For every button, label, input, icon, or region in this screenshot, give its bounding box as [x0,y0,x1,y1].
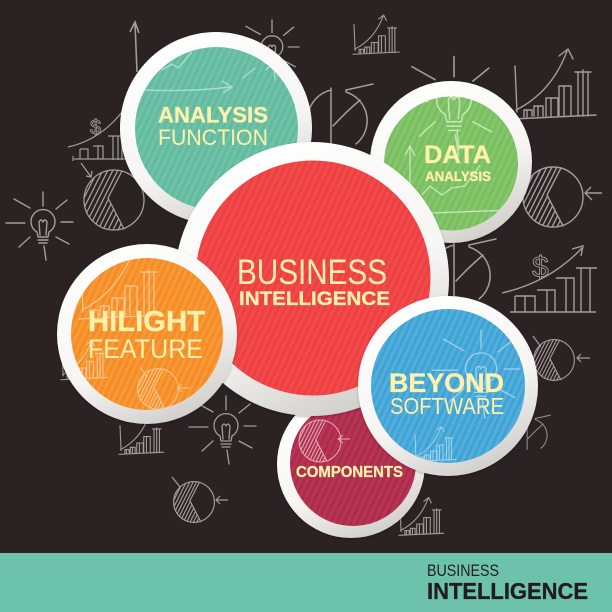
doodle: small pie right [533,336,590,380]
doodle: small chart top [353,15,399,54]
doodle: bulb bottom [189,396,256,464]
panel: hilight feature (orange) [57,244,237,424]
doodle: pie left [81,163,144,230]
panel: data analysis (green) [370,81,532,245]
footer title [427,561,588,604]
doodle: half pie small [514,415,550,449]
doodle: chart under orange [61,341,107,380]
text: business intelligence: INTELLIGENCE [239,288,390,310]
text: beyond software [389,368,504,419]
text: components: COMPONENTS [296,464,403,481]
text: hilight feature [88,306,205,364]
doodle: half pie right [431,239,496,301]
text: data analysis: ANALYSIS [425,168,491,184]
footer band [0,553,612,612]
text: hilight feature: HILIGHT [88,306,205,338]
panel: components (maroon) [277,407,424,538]
panel: beyond software (blue) [358,296,538,476]
text: analysis function: ANALYSIS [158,102,268,128]
doodle: chart bottom left [119,417,164,454]
green overlay doodle [404,96,500,214]
text: beyond software: SOFTWARE [390,393,504,419]
panel: business intelligence (red) [178,142,449,418]
text: data analysis: DATA [424,141,491,169]
orange overlay doodle [77,258,190,410]
doodle: dollar chart left: $ [90,117,101,139]
text: business intelligence: BUSINESS [237,253,387,292]
text: hilight feature: FEATURE [88,334,203,364]
text: data analysis [424,141,491,184]
maroon overlay doodle [299,420,350,462]
doodle: bulb top [239,20,299,81]
doodle: dollar chart right: $ [532,251,549,284]
doodle: tall arrow [130,22,139,72]
blue overlay doodle [414,330,520,462]
doodle: pie bottom [172,477,228,522]
footer title: INTELLIGENCE [427,578,588,604]
doodle: bulb behind green [400,56,498,155]
text: analysis function [158,102,268,150]
text: beyond software: BEYOND [389,368,504,398]
doodle: large chart right [513,49,596,119]
doodle: chart bottom right [399,498,444,535]
text: business intelligence [237,253,390,310]
panel: analysis function (teal) [120,32,312,224]
teal overlay doodle [143,52,290,93]
text: analysis function: FUNCTION [158,125,268,150]
doodle: half pie centre top [308,84,373,146]
doodle: pie right [523,167,602,227]
red overlay doodle [431,239,496,301]
doodle: bulb left [6,192,73,260]
footer title: BUSINESS [427,561,499,580]
doodle: dollar chart left [68,112,125,161]
doodle: dollar chart right [502,246,597,312]
